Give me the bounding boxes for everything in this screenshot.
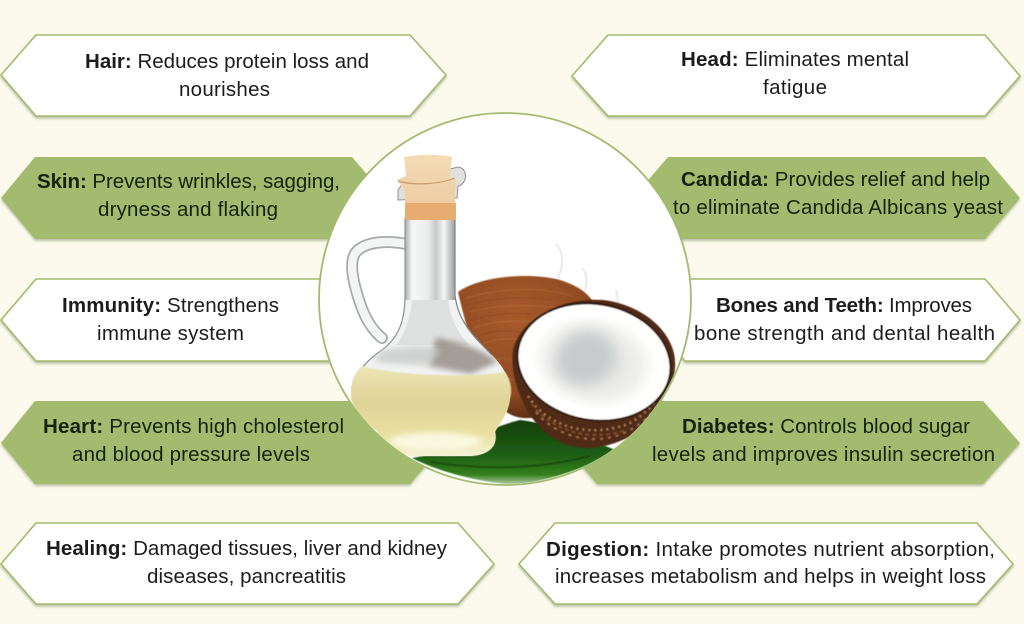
- text: immunity: Immunity: Strengthens: [62, 294, 279, 317]
- text: digestion line 2: increases metabolism and helps in weight loss: [555, 565, 986, 588]
- icon: green leaf: [412, 420, 618, 484]
- panel: heart: [1, 401, 445, 484]
- text: skin line 2: dryness and flaking: [98, 198, 278, 221]
- panel: immunity: [1, 279, 380, 361]
- handle: [352, 242, 406, 338]
- text: heart: Heart: Prevents high cholesterol: [43, 415, 344, 438]
- text: hair line 2: nourishes: [179, 78, 270, 101]
- liquid: [351, 366, 511, 456]
- text: bones and teeth line 2: bone strength and dental health: [694, 322, 995, 345]
- icon: whole coconut: [458, 244, 618, 418]
- panel: head: [572, 35, 1020, 116]
- text: head line 2: fatigue: [763, 76, 827, 99]
- collar: [398, 167, 466, 200]
- panel: healing: [1, 523, 494, 604]
- cork: [397, 154, 456, 203]
- text: diabetes line 2: levels and improves insulin secretion: [652, 443, 995, 466]
- text: candida line 2: to eliminate Candida Albicans yeast: [673, 196, 1003, 219]
- text: bones and teeth: Bones and Teeth: Improves: [716, 294, 972, 317]
- icon: halved coconut: [512, 298, 676, 448]
- panel: diabetes: [562, 401, 1020, 484]
- panel: skin: [1, 157, 387, 239]
- text: skin: Skin: Prevents wrinkles, sagging,: [37, 170, 340, 193]
- icon: glass bottle: [351, 155, 511, 456]
- panel: bones and teeth: [650, 279, 1020, 361]
- text: healing line 2: diseases, pancreatitis: [147, 565, 346, 588]
- text: diabetes: Diabetes: Controls blood sugar: [682, 415, 970, 438]
- text: head: Head: Eliminates mental: [681, 48, 909, 71]
- text: immunity line 2: immune system: [97, 322, 244, 345]
- text: healing: Healing: Damaged tissues, liver and kidney: [46, 537, 448, 560]
- text: digestion: Digestion: Intake promotes nutrient absorption,: [546, 538, 995, 561]
- text: hair: Hair: Reduces protein loss and: [85, 50, 369, 73]
- neck and body: [356, 300, 510, 456]
- text: candida: Candida: Provides relief and help: [681, 168, 990, 191]
- panel: hair: [1, 35, 446, 116]
- illustration: coconut oil bottle and coconuts: [351, 155, 681, 484]
- panel: digestion: [519, 523, 1013, 604]
- central photo circle: [319, 113, 691, 485]
- panel: candida: [633, 157, 1020, 239]
- text: heart line 2: and blood pressure levels: [72, 443, 310, 466]
